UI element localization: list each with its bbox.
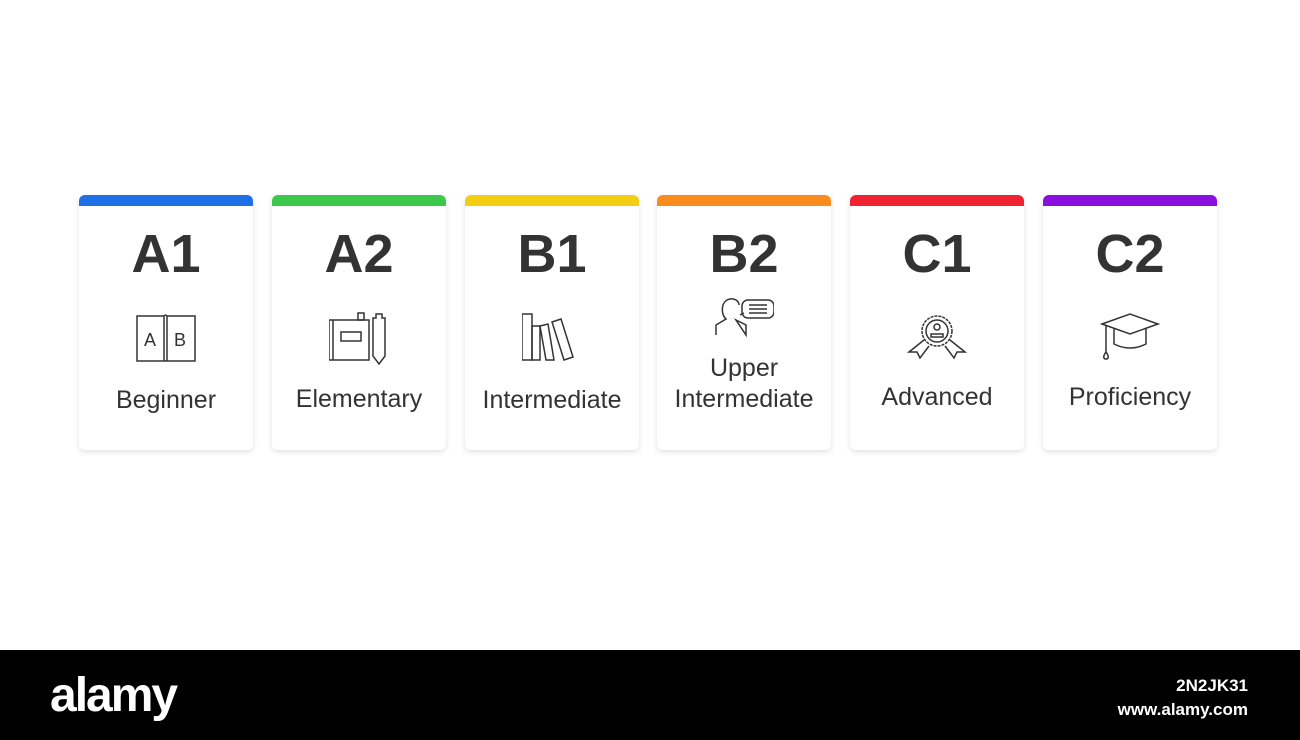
label Upper Intermediate: Intermediate [675,385,813,413]
level B2: B2 [709,224,779,284]
color bar purple [1043,195,1217,206]
icon: open book [136,314,196,362]
icon: books [522,313,574,361]
footer banner [0,650,1300,740]
icon: award rosette [907,315,967,360]
icon: speaking person [715,298,774,338]
level A1: A1 [131,224,201,284]
label Beginner: Beginner [116,386,216,414]
image id: www.alamy.com [1118,700,1248,719]
color bar red [850,195,1024,206]
icon: graduation cap [1100,313,1160,360]
label Advanced: Advanced [881,383,993,411]
color bar green [272,195,446,206]
color bar blue [79,195,253,206]
icon: open book: A [144,330,156,350]
logo alamy: alamy [50,669,176,722]
color bar yellow [465,195,639,206]
level C2: C2 [1095,224,1165,284]
icon: notebook and pen [329,312,386,366]
level C1: C1 [902,224,972,284]
card: A1 [79,195,253,450]
card: B2 [657,195,831,450]
icon: open book: B [174,330,186,350]
card: B1 [465,195,639,450]
level A2: A2 [324,224,394,284]
level B1: B1 [517,224,587,284]
image id: 2N2JK31 [1176,676,1248,695]
label Elementary: Elementary [296,385,422,413]
card: C2 [1043,195,1217,450]
label Upper Intermediate [675,354,813,413]
color bar orange [657,195,831,206]
image id [1118,676,1248,719]
label Proficiency: Proficiency [1069,383,1191,411]
label Intermediate: Intermediate [483,386,621,414]
label Upper Intermediate: Upper [710,354,778,382]
card: A2 [272,195,446,450]
card: C1 [850,195,1024,450]
